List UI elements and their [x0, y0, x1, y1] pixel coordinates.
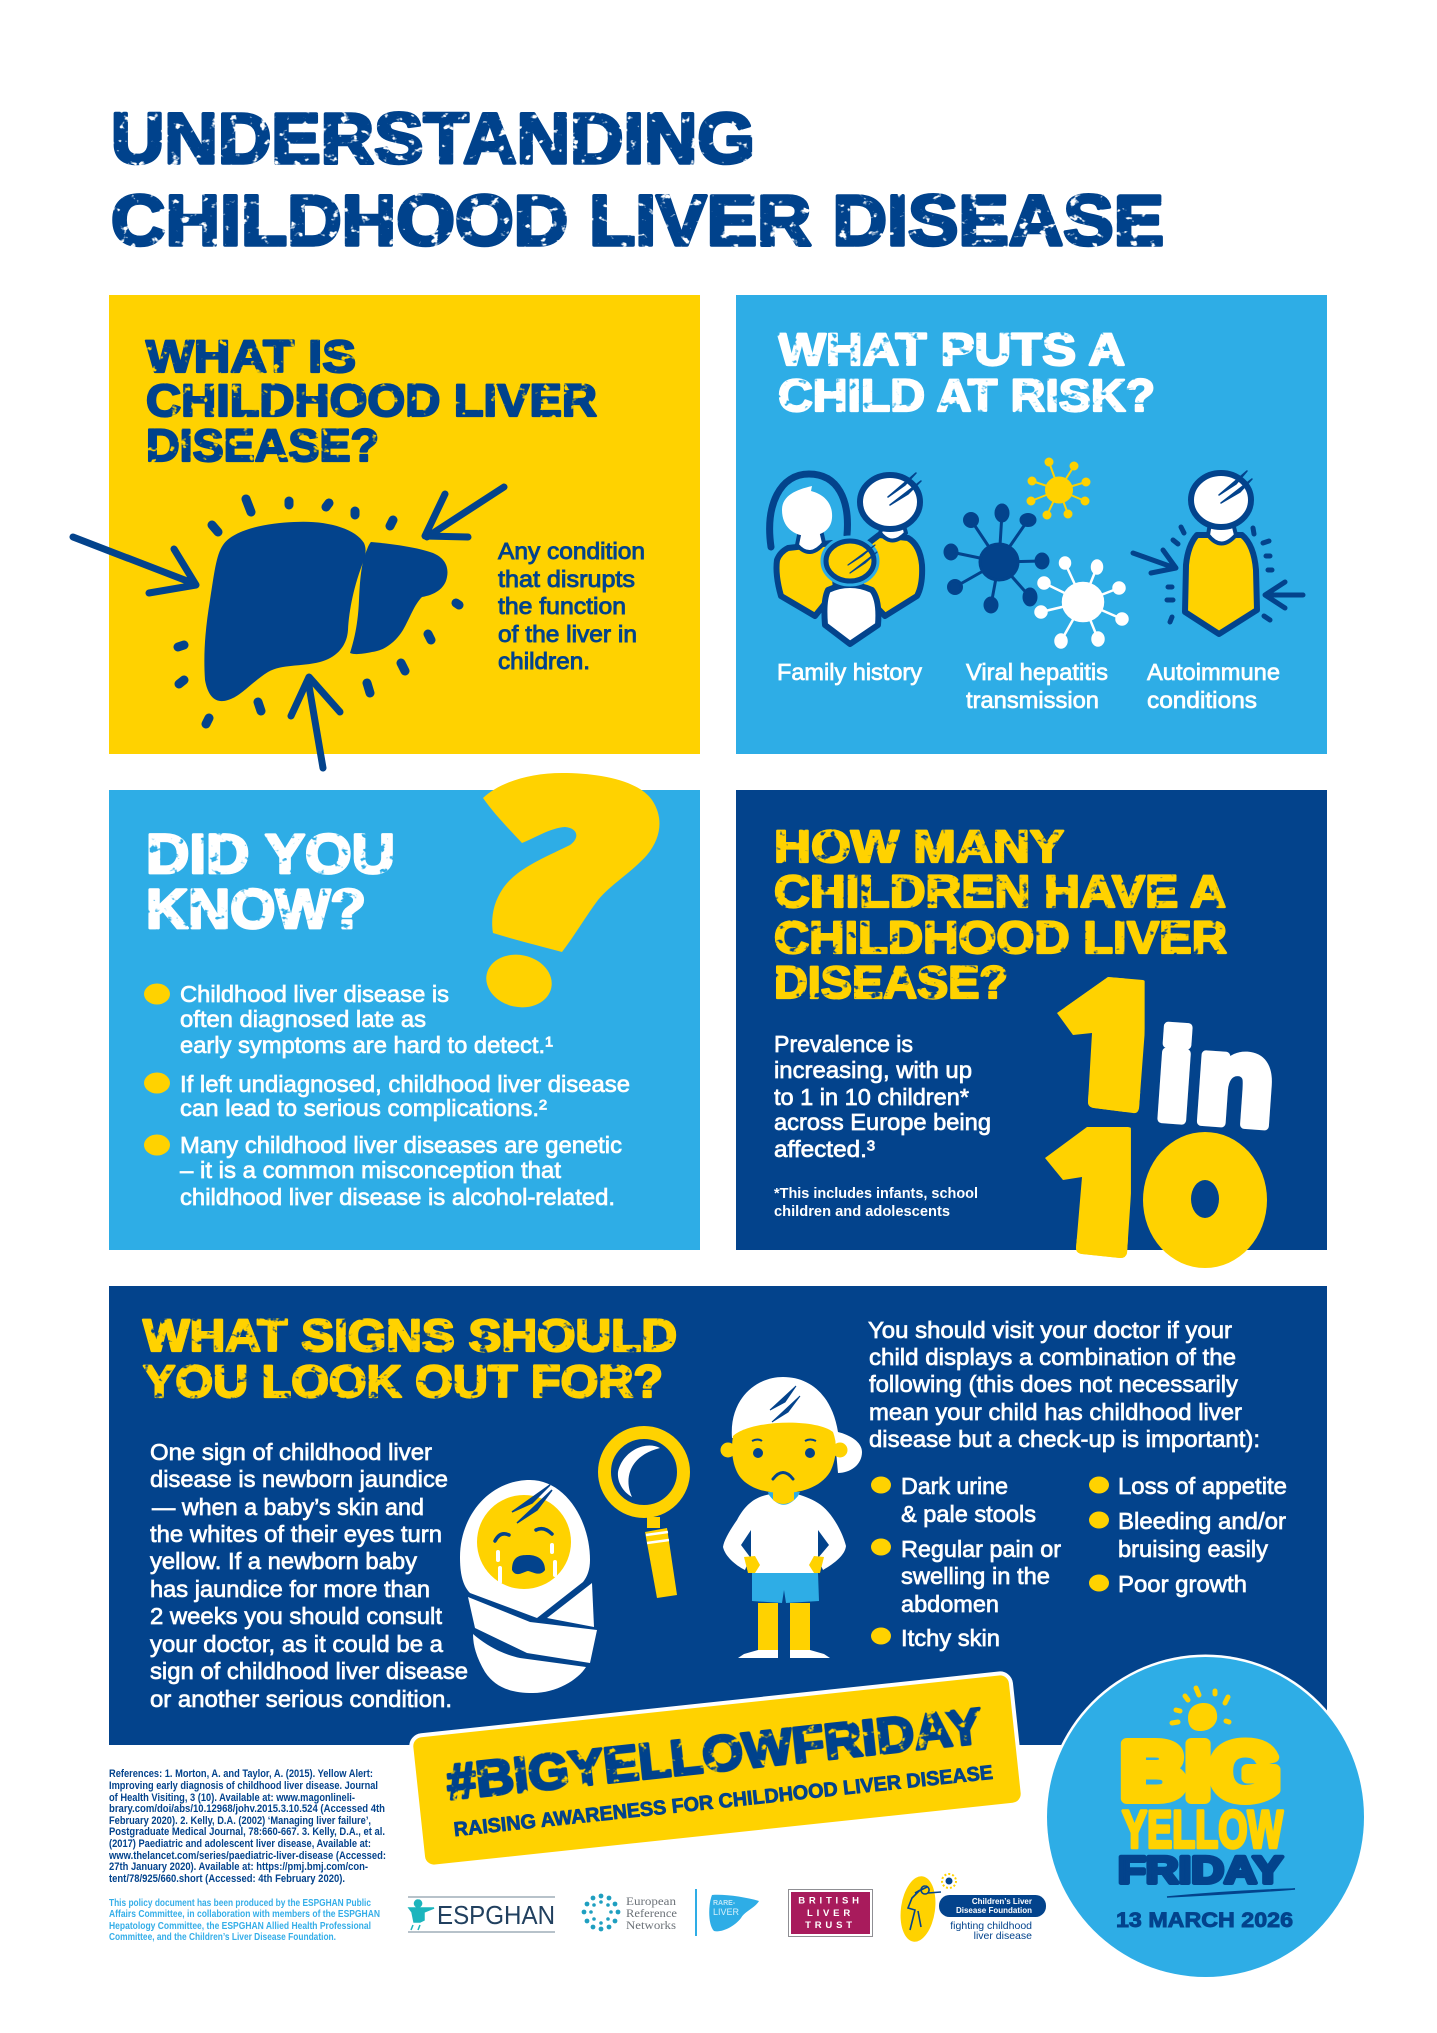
statistic: 1 in 10	[1045, 977, 1272, 1268]
text: newborn jaundice: or another serious condition.	[150, 1686, 452, 1712]
logo: European Reference Networks: European	[626, 1894, 676, 1908]
text: visit your doctor: disease but a check-up is important):	[869, 1426, 1260, 1452]
credit note: Affairs Committee, in collaboration with members of the ESPGHAN	[109, 1908, 380, 1920]
illustration: crying baby	[460, 1480, 597, 1693]
logo: ESPGHAN	[408, 1897, 555, 1932]
text: visit your doctor: You should visit your doctor if your	[868, 1317, 1232, 1343]
references: of Health Visiting, 3 (10). Available at: www.magonlineli-	[109, 1792, 355, 1804]
statistic: 1 in 10: 1	[1042, 1091, 1145, 1298]
text: prevalence: increasing, with up	[774, 1057, 972, 1083]
credit note: This policy document has been produced by the ESPGHAN Public	[109, 1897, 371, 1909]
icon: autoimmune person	[1133, 471, 1303, 634]
list: signs column two: Poor growth	[1118, 1571, 1247, 1597]
text: newborn jaundice: 2 weeks you should consult	[150, 1603, 443, 1629]
credit note	[109, 1897, 380, 1943]
label: autoimmune conditions: conditions	[1147, 687, 1257, 713]
text: prevalence: affected.³	[774, 1136, 875, 1162]
references: Improving early diagnosis of childhood liver disease. Journal	[109, 1780, 378, 1792]
text: newborn jaundice: your doctor, as it could be a	[150, 1631, 443, 1657]
credit note: Committee, and the Children’s Liver Disease Foundation.	[109, 1931, 336, 1943]
bullet: serious complications	[144, 1071, 630, 1121]
text: newborn jaundice: One sign of childhood liver	[150, 1439, 432, 1465]
list: signs column one: abdomen	[901, 1591, 999, 1617]
logo: Children's Liver Disease Foundation: Disease Foundation	[956, 1906, 1032, 1915]
logo word: FRIDAY: FRIDAY	[1118, 1850, 1283, 1892]
text: definition: the function	[498, 593, 626, 619]
heading: what is childhood liver disease: CHILDHOOD LIVER	[146, 375, 597, 426]
heading: how many children: HOW MANY	[774, 821, 1064, 872]
badge: big yellow friday	[1044, 1654, 1366, 1980]
logo: Rare-Liver: RARE-	[713, 1900, 736, 1907]
heading: what signs	[143, 1310, 677, 1407]
references: brary.com/doi/abs/10.12968/johv.2015.3.10.524 (Accessed 4th	[109, 1803, 385, 1815]
text: visit your doctor: child displays a combination of the	[869, 1344, 1236, 1370]
list: signs column one: swelling in the	[901, 1563, 1050, 1589]
label: autoimmune conditions	[1147, 659, 1280, 713]
bullet: serious complications: If left undiagnosed, childhood liver disease	[180, 1071, 630, 1097]
text: visit your doctor: following (this does not necessarily	[869, 1371, 1239, 1397]
text: newborn jaundice	[150, 1439, 468, 1712]
bullet: genetic: – it is a common misconception that	[180, 1157, 562, 1183]
logo: European Reference Networks: Reference	[626, 1906, 677, 1920]
text: newborn jaundice: disease is newborn jaundice	[150, 1466, 448, 1492]
label: family history: Family history	[777, 659, 923, 685]
references: References: 1. Morton, A. and Taylor, A. (2015). Yellow Alert:	[109, 1768, 373, 1780]
bullet: diagnosed late: Childhood liver disease is	[180, 981, 449, 1007]
logo: Children's Liver Disease Foundation: Children’s Liver	[972, 1897, 1032, 1906]
icon: sun	[1172, 1688, 1229, 1731]
text: visit your doctor: mean your child has childhood liver	[869, 1399, 1242, 1425]
banner: bigyellowfriday hashtag	[410, 1672, 1024, 1868]
list: signs column one: Regular pain or	[901, 1536, 1061, 1562]
icon: family	[770, 473, 922, 644]
text: definition	[498, 538, 645, 674]
references: 27th January 2020). Available at: https://pmj.bmj.com/con-	[109, 1861, 368, 1873]
list: signs column two: bruising easily	[1118, 1536, 1269, 1562]
heading: what signs: WHAT SIGNS SHOULD	[143, 1310, 677, 1361]
illustration: child	[720, 1377, 862, 1658]
label: viral hepatitis transmission	[966, 659, 1108, 713]
logo: Children's Liver Disease Foundation: fighting childhood	[950, 1920, 1032, 1932]
bullet: diagnosed late: often diagnosed late as	[180, 1006, 426, 1032]
heading: did you know	[146, 822, 395, 940]
text: visit your doctor	[868, 1317, 1260, 1452]
tagline: RAISING AWARENESS FOR CHILDHOOD LIVER DISEASE	[453, 1762, 994, 1841]
footnote: children and adolescents	[774, 1204, 950, 1220]
references	[108, 1768, 386, 1885]
footnote	[774, 1186, 978, 1220]
heading: what signs: YOU LOOK OUT FOR?	[143, 1356, 663, 1407]
bullet: diagnosed late: early symptoms are hard to detect.¹	[180, 1032, 553, 1058]
label: viral hepatitis transmission: Viral hepatitis	[966, 659, 1108, 685]
logo word: YELLOW: YELLOW	[1122, 1800, 1283, 1860]
list: signs column one	[871, 1473, 1061, 1651]
credit note: Hepatology Committee, the ESPGHAN Allied Health Professional	[109, 1920, 371, 1932]
logo: British Liver Trust: LIVER	[807, 1908, 854, 1919]
text: definition: of the liver in	[498, 621, 637, 647]
list: signs column two	[1089, 1473, 1287, 1597]
text: newborn jaundice: has jaundice for more than	[150, 1576, 430, 1602]
bullet: genetic: childhood liver disease is alcohol-related.	[180, 1184, 615, 1210]
logo: British Liver Trust: BRITISH	[798, 1896, 863, 1906]
icon: liver with arrows	[73, 487, 504, 768]
title	[111, 100, 1164, 261]
list: signs column two: Loss of appetite	[1118, 1473, 1287, 1499]
logo: Rare-Liver	[696, 1889, 759, 1936]
text: definition: children.	[498, 648, 590, 674]
date: 13 MARCH 2026	[1116, 1909, 1293, 1932]
text: newborn jaundice: — when a baby’s skin and	[152, 1494, 424, 1520]
text: prevalence: to 1 in 10 children*	[774, 1084, 969, 1110]
statistic: 1 in 10: 1	[1052, 935, 1161, 1154]
statistic: 1 in 10: 0	[1150, 1110, 1260, 1294]
text: newborn jaundice: the whites of their eyes turn	[150, 1521, 442, 1547]
statistic: 1 in 10: in	[1150, 1005, 1282, 1155]
logo: European Reference Networks: Networks	[626, 1918, 676, 1932]
icon: question mark	[481, 773, 659, 1013]
references: (2017) Paediatric and adolescent liver disease, Available at:	[109, 1838, 371, 1850]
panel: what puts a child at risk	[736, 295, 1327, 754]
logo: Children's Liver Disease Foundation: liver disease	[974, 1930, 1032, 1942]
heading: what puts a child at risk	[778, 324, 1155, 421]
heading: how many children: DISEASE?	[774, 957, 1008, 1008]
heading: how many children: CHILDREN HAVE A	[774, 866, 1226, 917]
text: definition: that disrupts	[498, 566, 635, 592]
logo: Rare-Liver: LIVER	[713, 1907, 740, 1917]
heading: what is childhood liver disease: DISEASE?	[146, 420, 379, 471]
hashtag: #BIGYELLOWFRIDAY	[444, 1698, 985, 1811]
heading: what puts a child at risk: WHAT PUTS A	[778, 324, 1125, 375]
footnote: *This includes infants, school	[774, 1186, 978, 1202]
logo: Children's Liver Disease Foundation	[897, 1874, 1046, 1944]
panel: what is childhood liver disease	[73, 295, 700, 768]
heading: what is childhood liver disease	[146, 331, 597, 471]
text: prevalence: across Europe being	[774, 1109, 991, 1135]
list: signs column one: Itchy skin	[901, 1625, 1000, 1651]
heading: did you know: DID YOU	[146, 822, 395, 885]
logo: ESPGHAN: ESPGHAN	[437, 1900, 555, 1930]
text: prevalence: Prevalence is	[774, 1031, 913, 1057]
heading: did you know: KNOW?	[146, 877, 366, 940]
heading: how many children: CHILDHOOD LIVER	[774, 912, 1227, 963]
heading: how many children	[774, 821, 1227, 1008]
logo: British Liver Trust	[788, 1890, 872, 1936]
logo word: BIG: BIG	[1121, 1726, 1280, 1816]
label: autoimmune conditions: Autoimmune	[1147, 659, 1280, 685]
list: signs column one: Dark urine	[901, 1473, 1008, 1499]
panel: how many children	[736, 790, 1327, 1298]
references: February 2020). 2. Kelly, D.A. (2002) ‘Managing liver failure’,	[109, 1815, 371, 1827]
list: signs column one: & pale stools	[901, 1501, 1036, 1527]
illustration: magnifying glass	[604, 1432, 684, 1598]
references: www.thelancet.com/series/paediatric-liver-disease (Accessed:	[108, 1850, 386, 1862]
text: newborn jaundice: yellow. If a newborn baby	[150, 1548, 418, 1574]
title: UNDERSTANDING	[111, 100, 755, 179]
bullet: genetic	[144, 1132, 622, 1210]
bullet: serious complications: can lead to serious complications.²	[180, 1095, 547, 1121]
label: viral hepatitis transmission: transmission	[966, 687, 1099, 713]
text: prevalence	[774, 1031, 991, 1162]
bullet: diagnosed late	[144, 981, 553, 1058]
panel: what signs should you look out for	[109, 1286, 1327, 1745]
heading: what is childhood liver disease: WHAT IS	[146, 331, 356, 382]
panel: did you know	[109, 773, 700, 1250]
logo: British Liver Trust: TRUST	[805, 1920, 856, 1931]
references: tent/78/925/660.short (Accessed: 4th February 2020).	[109, 1873, 345, 1885]
text: newborn jaundice: sign of childhood liver disease	[150, 1658, 468, 1684]
icon: viruses	[945, 458, 1128, 648]
text: definition: Any condition	[498, 538, 645, 564]
bullet: genetic: Many childhood liver diseases are genetic	[180, 1132, 622, 1158]
heading: what puts a child at risk: CHILD AT RISK?	[778, 370, 1155, 421]
title: CHILDHOOD LIVER DISEASE	[111, 182, 1164, 261]
list: signs column two: Bleeding and/or	[1118, 1508, 1286, 1534]
logo: European Reference Networks	[582, 1894, 677, 1932]
references: Postgraduate Medical Journal, 78:660-667. 3. Kelly, D.A., et al.	[109, 1826, 385, 1838]
